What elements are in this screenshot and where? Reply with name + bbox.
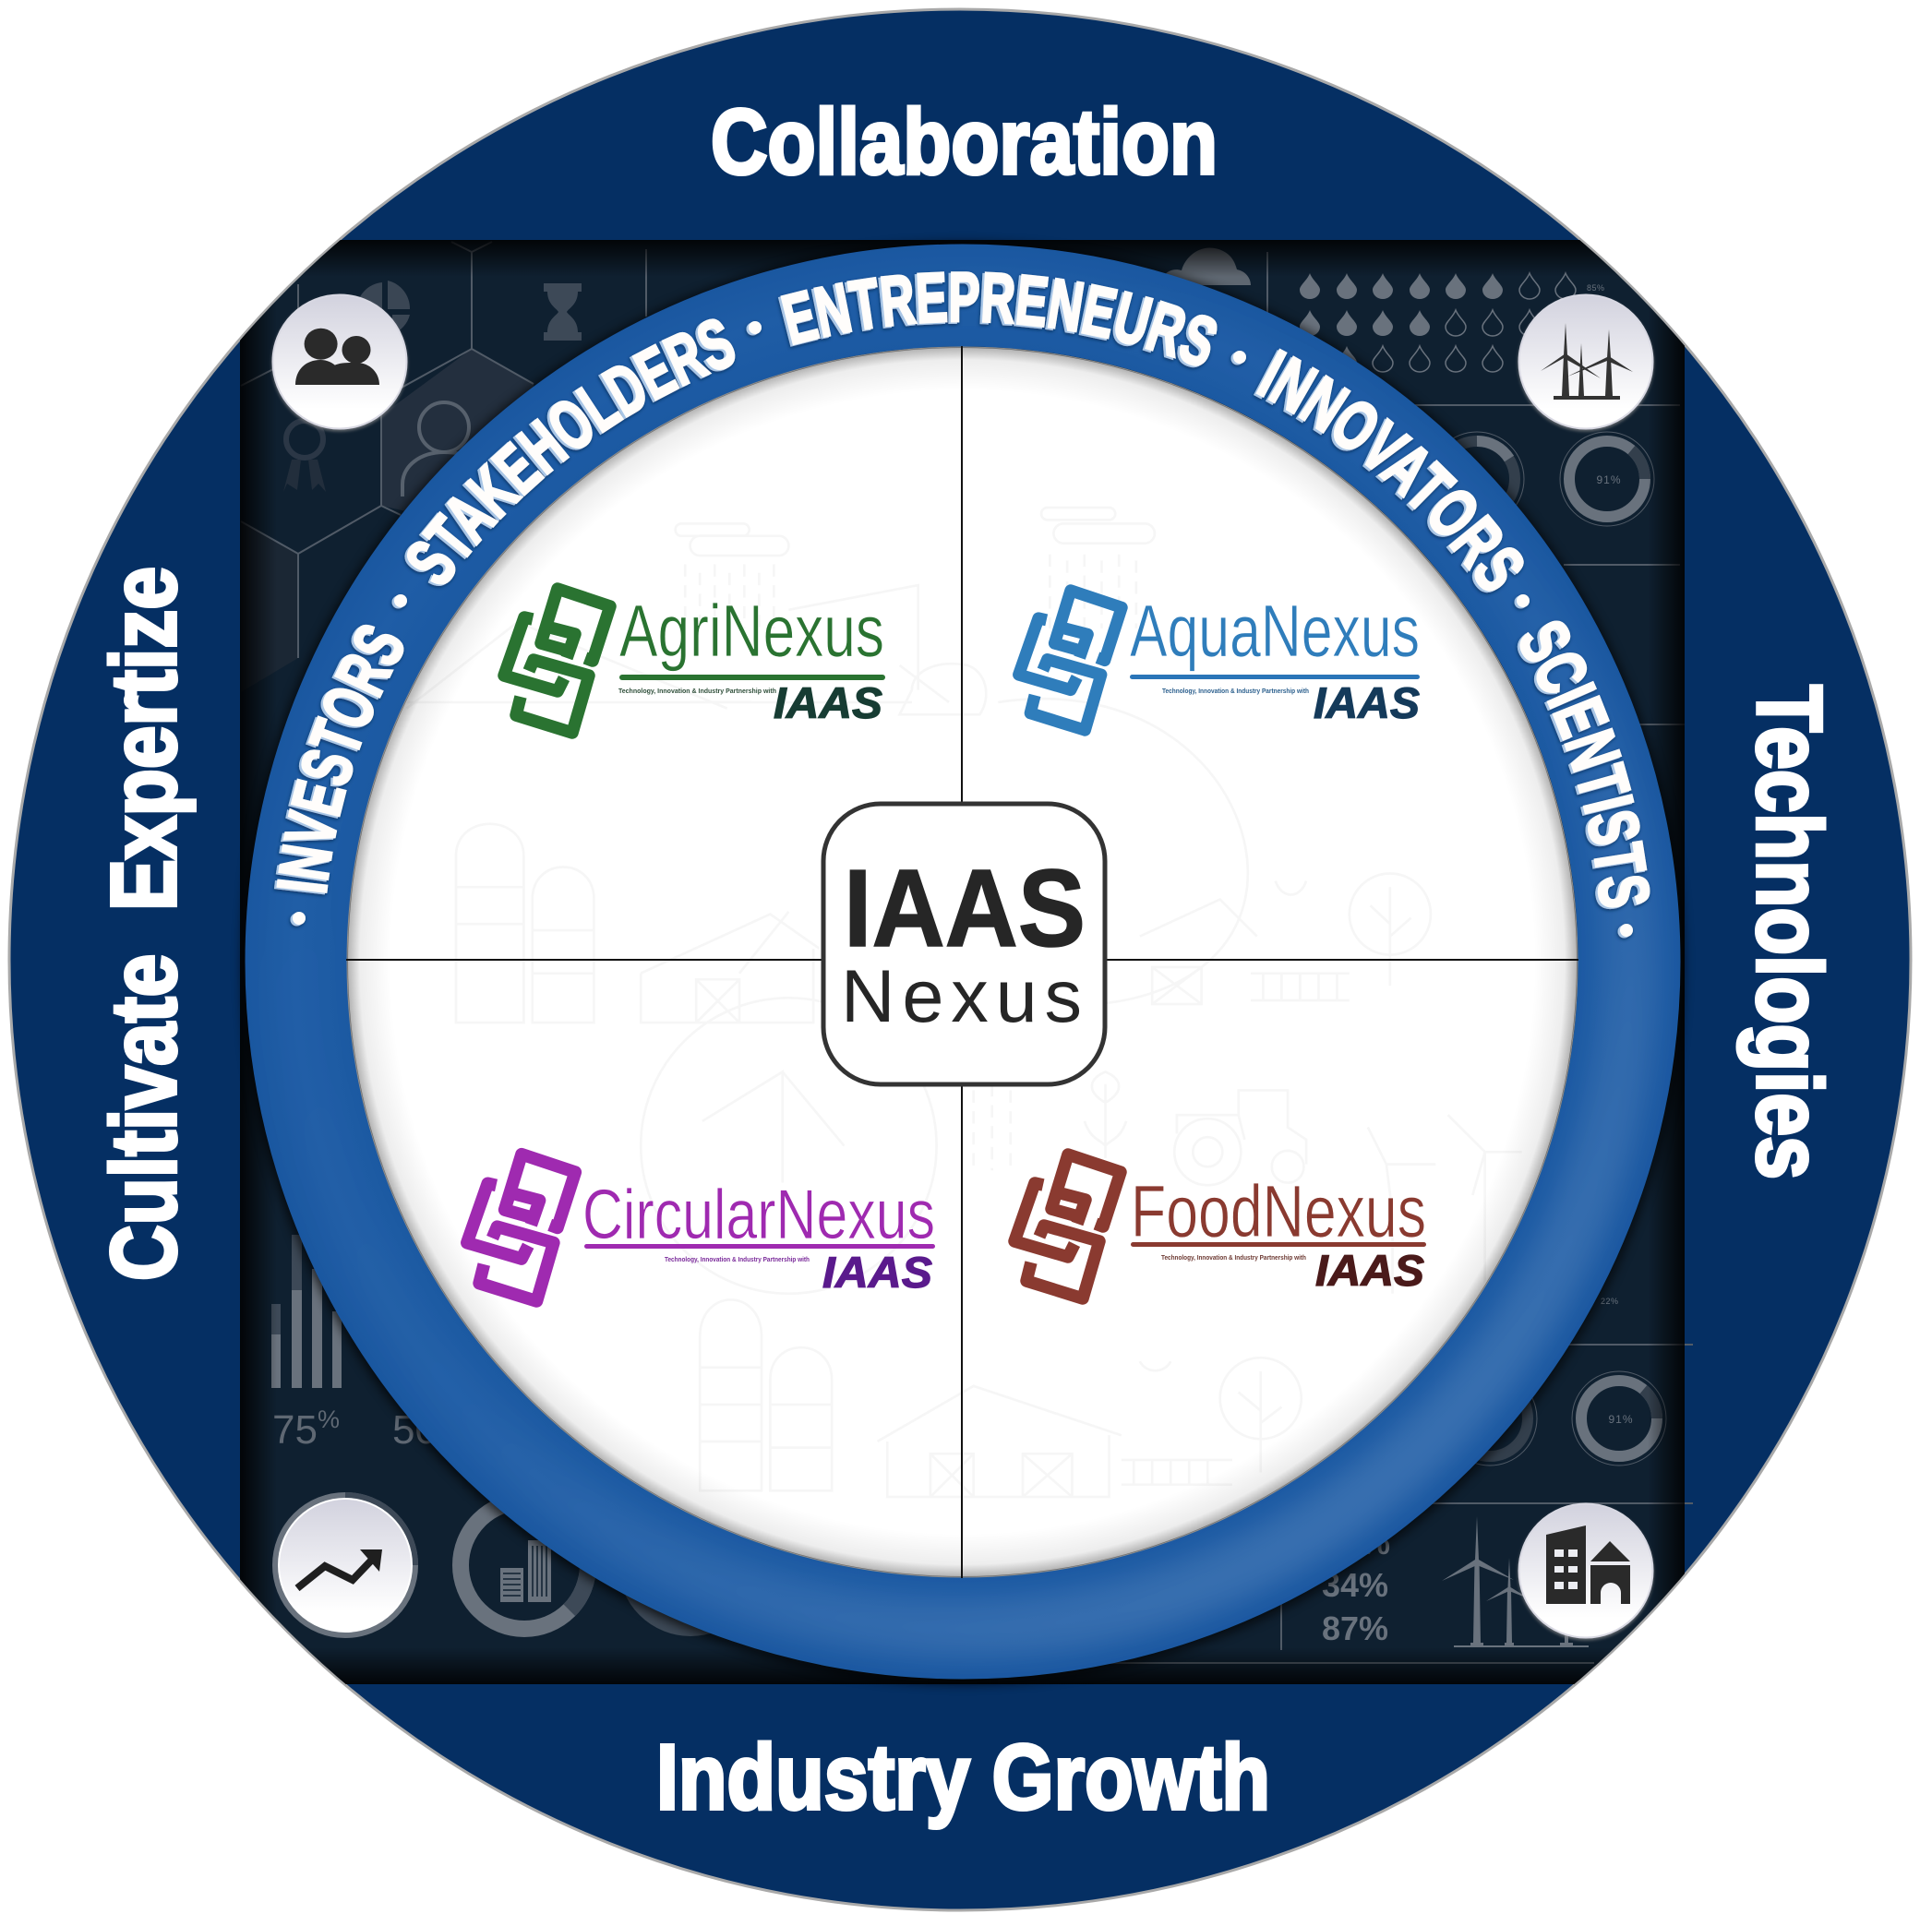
tagline: Technology, Innovation & Industry Partnership with — [1162, 688, 1309, 695]
inner edge shading — [347, 347, 1577, 1576]
icon badge: wind turbines — [1519, 295, 1652, 428]
logo: AgriNexus — [504, 589, 885, 733]
icon: blue chain links — [1019, 591, 1122, 730]
icon: brown chain links — [1014, 1154, 1121, 1298]
donut: 91 percent top: 91% — [1596, 473, 1622, 486]
donut: 91 percent top — [1430, 432, 1654, 526]
logo: FoodNexus — [1014, 1154, 1426, 1298]
donut: 91 percent bottom: 91% — [1608, 1413, 1634, 1426]
icon: green chain links — [504, 589, 610, 733]
wordmark: FoodNexus — [1131, 1170, 1426, 1252]
bar chart 75 percent: % — [318, 1406, 340, 1433]
tagline: Technology, Innovation & Industry Partnership with — [1161, 1255, 1306, 1262]
heading: Technologies: Technologies — [1737, 685, 1841, 1179]
icon: cloud — [1161, 248, 1251, 285]
icon: hourglass — [544, 283, 582, 341]
donut with city buildings — [461, 1501, 588, 1629]
partner mark: IAAS — [774, 678, 882, 727]
ring word: scientists: SCIENTISTS — [1516, 620, 1651, 912]
faint farm watermark — [357, 508, 1522, 1497]
wordmark: CircularNexus — [582, 1176, 935, 1254]
ring word: stakeholders: STAKEHOLDERS — [402, 318, 737, 589]
ring word: entrepreneurs: ENTREPRENEURS — [776, 271, 1218, 371]
ring word: innovators: INNOVATORS — [1252, 349, 1525, 596]
quadrant divider lines — [346, 346, 1578, 1578]
partner mark: IAAS — [822, 1248, 932, 1297]
label: 22 percent: 22% — [1601, 1297, 1619, 1306]
badge text: IAAS: IAAS — [844, 847, 1086, 970]
percentages 34 and 87: % — [1361, 1524, 1390, 1561]
tagline: Technology, Innovation & Industry Partnership with — [618, 688, 776, 695]
icon badge: people — [273, 295, 406, 428]
wordmark: AgriNexus — [619, 590, 884, 672]
heading: Collaboration: Collaboration — [711, 90, 1218, 194]
dark infographic panel — [240, 240, 1693, 1684]
icon: ribbon — [283, 421, 326, 492]
ring bullets — [293, 321, 1633, 937]
logo: AquaNexus — [1019, 590, 1420, 730]
icon: pie chart — [360, 281, 410, 330]
hexagon pattern top left — [241, 242, 646, 692]
tagline: Technology, Innovation & Industry Partnership with — [665, 1257, 810, 1263]
panel edge shading — [240, 240, 1685, 1684]
bar chart 75 percent: 75 — [272, 1407, 318, 1453]
water drops chart: 85% — [1587, 283, 1605, 293]
donut: 91 percent bottom — [1475, 1371, 1667, 1465]
percentages 34 and 87: 34% — [1322, 1566, 1388, 1604]
inner white circle — [347, 347, 1578, 1578]
icon: purple chain links — [467, 1154, 575, 1301]
partner mark: IAAS — [1314, 678, 1420, 727]
bar chart 75 percent: 50 — [392, 1407, 438, 1453]
partner mark: IAAS — [1315, 1246, 1424, 1295]
badge text: Nexus: Nexus — [841, 955, 1082, 1038]
percentages 34 and 87 — [1322, 1541, 1389, 1641]
icon: person outline — [401, 401, 471, 496]
bar chart 75 percent — [271, 1235, 438, 1453]
center badge — [823, 804, 1105, 1084]
donut partly hidden — [627, 1501, 754, 1628]
ring word: investors: INVESTORS — [272, 624, 405, 897]
water drops chart — [1300, 273, 1605, 372]
ring labels — [272, 271, 1651, 941]
logo: CircularNexus — [467, 1154, 935, 1301]
blue ring — [243, 244, 1683, 1683]
icon badge: buildings — [1519, 1504, 1652, 1637]
percentages 34 and 87: 87% — [1322, 1609, 1388, 1647]
heading: Industry Growth: Industry Growth — [656, 1726, 1270, 1829]
wind turbines silhouette — [1442, 1516, 1589, 1647]
heading: Cultivate Expertize: Cultivate Expertize — [92, 567, 196, 1281]
wordmark: AquaNexus — [1130, 590, 1420, 672]
icon badge: growth chart — [276, 1496, 414, 1634]
